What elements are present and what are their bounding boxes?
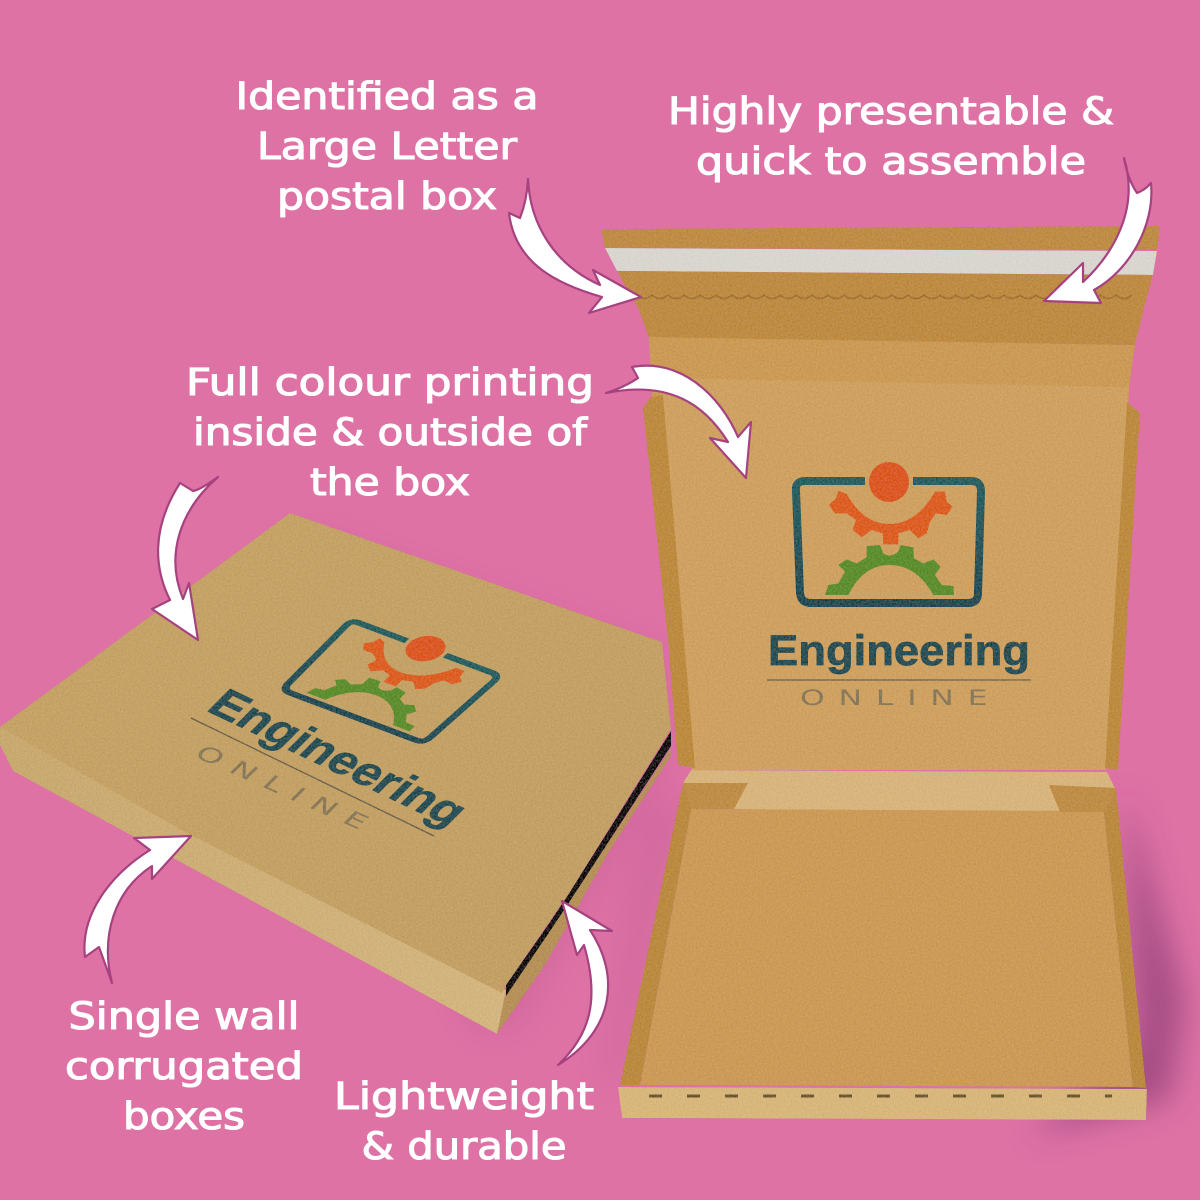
arrow: presentable (1044, 158, 1151, 303)
inside logo: Engineering (768, 627, 1030, 675)
lid top flap (601, 226, 1160, 250)
heading: lightweight (334, 1075, 594, 1168)
arrow: large letter (509, 179, 641, 313)
heading: single wall: boxes (123, 1095, 245, 1138)
tray floor (640, 809, 1133, 1087)
heading: single wall: corrugated (65, 1045, 303, 1088)
tray perforations (649, 1094, 1112, 1098)
closed box (0, 513, 671, 1034)
lid left side flap (643, 395, 695, 768)
closed box logo: Engineering (198, 680, 480, 834)
lid fold (649, 337, 1135, 420)
heading: large letter: postal box (277, 175, 497, 218)
heading: printing (186, 361, 594, 504)
heading: single wall (65, 995, 303, 1138)
white adhesive strip (605, 248, 1157, 275)
inside logo (767, 462, 1031, 710)
tray left corner tab (683, 783, 748, 809)
lid inner panel (660, 378, 1129, 770)
tray left wall (620, 783, 691, 1085)
heading: printing: inside & outside of (193, 411, 588, 454)
heading: printing: Full colour printing (186, 361, 594, 404)
heading: large letter: Identified as a (236, 75, 538, 118)
heading: lightweight: Lightweight (334, 1075, 594, 1118)
open box (601, 226, 1160, 1120)
tray hinge (683, 770, 1116, 812)
heading: presentable (668, 90, 1114, 183)
tray right corner tab (1049, 785, 1116, 812)
tray front wall (618, 1087, 1147, 1120)
heading: presentable: Highly presentable & (668, 90, 1114, 133)
perforated tear line (636, 295, 1132, 298)
tear strip flap (617, 271, 1153, 345)
heading: lightweight: & durable (362, 1125, 566, 1168)
arrow: printing (606, 366, 751, 478)
inside logo: ONLINE (800, 686, 988, 710)
arrow: closed box top (152, 477, 218, 640)
closed box logo (189, 609, 511, 836)
closed box front wall (0, 726, 506, 1034)
heading: presentable: quick to assemble (696, 140, 1086, 183)
lid right side flap (1105, 402, 1140, 770)
heading: printing: the box (310, 461, 470, 504)
heading: large letter (236, 75, 538, 218)
shadows (300, 530, 1185, 1135)
closed box top face (0, 513, 671, 993)
heading: large letter: Large Letter (257, 125, 518, 168)
closed box right edge (497, 748, 671, 1034)
closed box logo: ONLINE (189, 741, 375, 834)
heading: single wall: Single wall (68, 995, 300, 1038)
tray right wall (1104, 788, 1146, 1088)
arrow: lightweight (558, 901, 612, 1065)
arrow: single wall (84, 836, 191, 983)
